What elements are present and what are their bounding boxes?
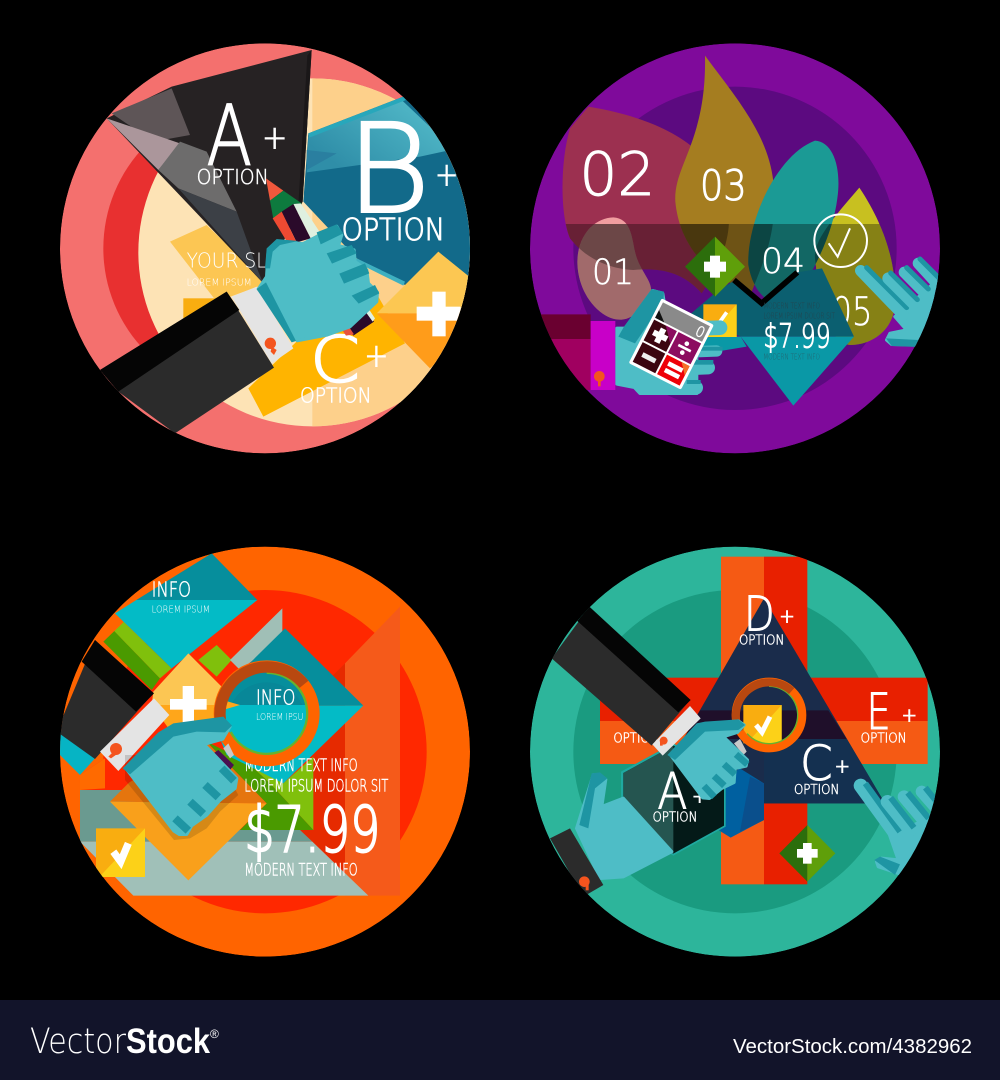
sleeve with cuff: [541, 314, 616, 390]
label 02: 02: [579, 140, 655, 209]
brand logo: ®: [210, 1027, 219, 1041]
petal 02: [562, 106, 706, 294]
panel: A B C options circle: [60, 43, 486, 453]
label 03: 03: [700, 161, 747, 210]
hand: [257, 224, 379, 342]
navy triangle: [647, 598, 885, 803]
label 01: 01: [592, 253, 634, 293]
hand with calculator: [617, 289, 723, 393]
option label A: OPTION: [197, 165, 269, 189]
option A: OPTION: [653, 811, 697, 826]
plus: +: [835, 756, 850, 777]
orange diamond: [110, 723, 267, 880]
plus sign: +: [364, 339, 388, 375]
top info label: INFO: [152, 578, 191, 602]
panel: info price circle: [57, 547, 470, 957]
image id: VectorStock.com/4382962: [733, 1036, 972, 1058]
glass triangle A: [107, 50, 312, 283]
label 05: 05: [832, 289, 872, 335]
brand logo: Stock: [126, 1022, 210, 1061]
magnifier subtitle: LOREM IPSU: [256, 712, 303, 723]
modern text line bottom: MODERN TEXT INFO: [244, 861, 358, 880]
option label B: OPTION: [342, 213, 445, 248]
green stripes: [103, 622, 313, 830]
option E: OPTION: [861, 731, 907, 746]
price text block: MODERN TEXT INFO: [763, 352, 820, 361]
green plus diamond: [779, 825, 835, 882]
price text block: $7.99: [763, 317, 831, 356]
shirt cuff: [100, 698, 169, 771]
orange corner: [97, 613, 123, 642]
petal 05: [815, 188, 895, 345]
left sleeve area: [57, 640, 154, 790]
yellow check box: [703, 304, 737, 337]
slide title: YOUR SL: [187, 249, 267, 273]
pencil: [266, 178, 375, 336]
price: $7.99: [244, 793, 380, 867]
right pointing hand: [861, 783, 941, 875]
price text block: [763, 301, 835, 361]
yellow plus diamond: [152, 653, 240, 735]
label 04: 04: [761, 242, 805, 282]
price text block: LOREM IPSUM DOLOR SIT: [763, 311, 835, 320]
heading A: A: [207, 87, 252, 184]
plus: +: [902, 706, 917, 727]
option C: OPTION: [794, 783, 839, 798]
gray triangle: [80, 790, 368, 896]
label E: E: [867, 683, 891, 741]
top info subtitle: LOREM IPSUM: [152, 604, 210, 615]
check box: [96, 828, 145, 877]
brand logo: Vector: [30, 1022, 127, 1062]
plus: +: [692, 786, 707, 807]
shirt cuff: [652, 706, 701, 756]
petal 03: [675, 56, 774, 292]
heading C: C: [310, 323, 360, 397]
pointing hand: [861, 259, 941, 347]
option left: OPTION: [613, 731, 659, 746]
brand logo: [30, 1022, 219, 1062]
suit sleeve: [100, 292, 274, 433]
shirt cuff: [232, 287, 293, 363]
slide subtitle: LOREM IPSUM: [187, 278, 252, 289]
label C: C: [800, 736, 833, 792]
label D: D: [744, 586, 775, 642]
panel: numbered petals circle: [530, 43, 941, 453]
dark hexagon A: [621, 743, 726, 856]
price text block: MODERN TEXT INFO: [763, 301, 820, 310]
magnifier info label: INFO: [256, 685, 295, 709]
cross vertical bar: [721, 557, 807, 884]
heading B: B: [346, 98, 430, 241]
magnifier lens: [217, 666, 317, 761]
left thumb-up hand: [550, 772, 672, 897]
panel: cross options circle: [530, 547, 941, 957]
hand with magnifier: [123, 717, 238, 840]
dark band overlay: [566, 224, 894, 345]
blue hexagon: [718, 768, 764, 838]
petal 01: [577, 217, 651, 320]
footer bar: [0, 1000, 1000, 1080]
yellow band: [248, 297, 405, 417]
right bar: [300, 607, 400, 896]
petal 04: [748, 141, 838, 303]
plus sign: +: [262, 120, 287, 156]
hand with magnifier: [667, 719, 747, 798]
suit sleeve: [552, 607, 691, 746]
check circle: [814, 214, 867, 267]
magnifier with check box: [736, 682, 802, 748]
option D: OPTION: [739, 633, 784, 648]
blue panel: [303, 97, 473, 286]
teal price diamond: [690, 268, 854, 406]
top info banner: [115, 553, 257, 668]
yellow arrow with plus: [377, 252, 473, 368]
plus sign: +: [435, 158, 458, 194]
lorem line: LOREM IPSUM DOLOR SIT: [244, 776, 388, 795]
yellow slide panel: [170, 225, 267, 322]
cross horizontal bar: [600, 678, 928, 764]
label A: A: [657, 762, 687, 820]
green plus diamond: [685, 237, 745, 297]
plus: +: [779, 606, 795, 627]
option label C: OPTION: [300, 383, 372, 407]
modern text line: MODERN TEXT INFO: [244, 756, 358, 775]
calculator: 0: [692, 323, 708, 342]
right info diamond: [207, 628, 363, 783]
gray strip: [230, 608, 282, 670]
